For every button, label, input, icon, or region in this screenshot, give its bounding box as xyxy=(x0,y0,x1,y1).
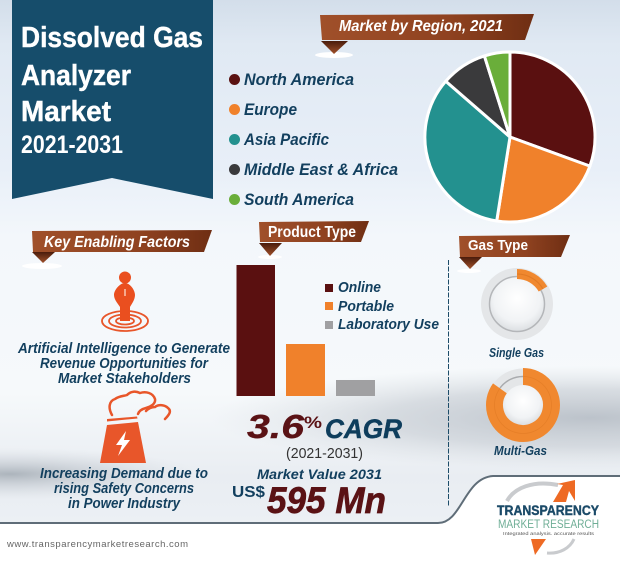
logo: transparency market research xyxy=(497,480,599,555)
donut: single gas: Single Gas xyxy=(489,345,544,360)
legend: regions: North America xyxy=(244,70,354,89)
title banner: Dissolved Gas xyxy=(21,22,203,54)
title banner: Market xyxy=(21,96,111,128)
callout: CAGR: % xyxy=(304,413,322,432)
donut: single gas xyxy=(481,268,553,360)
callout: market value: 595 Mn xyxy=(267,480,386,521)
heading: key enabling factors: Key Enabling Factors xyxy=(44,234,190,251)
footer url: www.transparencymarketresearch.com xyxy=(6,539,188,550)
heading: product type: Product Type xyxy=(268,224,356,241)
legend: regions: Asia Pacific xyxy=(243,130,329,149)
legend: regions: Middle East & Africa xyxy=(244,160,398,179)
logo: transparency market research: MARKET RESEARCH xyxy=(498,519,599,531)
title banner xyxy=(12,0,213,199)
legend: regions xyxy=(229,70,398,209)
callout: market value xyxy=(232,466,386,521)
heading: gas type: Gas Type xyxy=(468,237,528,254)
icon: power plant with smoke xyxy=(100,392,170,463)
legend: product type xyxy=(325,280,439,333)
logo: transparency market research: TRANSPARENCY xyxy=(497,503,599,518)
factor text: artificial intelligence: Artificial Intelligence to Generate xyxy=(17,341,230,357)
legend: product type: Portable xyxy=(338,299,394,315)
factor text: artificial intelligence: Revenue Opportunities for xyxy=(40,356,209,372)
legend: regions: South America xyxy=(244,190,354,209)
callout: CAGR: (2021-2031) xyxy=(286,445,363,462)
factor text: artificial intelligence: Market Stakeholders xyxy=(58,371,191,387)
heading: product type xyxy=(258,221,369,259)
title banner: 2021-2031 xyxy=(21,131,123,159)
divider: dashed vertical line xyxy=(448,260,450,507)
donut: multi-gas xyxy=(486,368,560,458)
factor text: increasing demand xyxy=(40,466,208,512)
callout: market value: US$ xyxy=(232,484,265,501)
factor text: artificial intelligence xyxy=(17,341,230,387)
heading: market by region xyxy=(315,14,534,58)
callout: CAGR xyxy=(247,408,402,462)
pie chart: market by region xyxy=(425,52,595,222)
legend: product type: Laboratory Use xyxy=(338,317,439,333)
title banner: Analyzer xyxy=(21,60,131,92)
callout: CAGR: 3.6 xyxy=(247,408,305,445)
heading: market by region: Market by Region, 2021 xyxy=(339,18,503,35)
heading: key enabling factors xyxy=(22,230,212,269)
factor text: increasing demand: Increasing Demand due to xyxy=(40,466,208,482)
factor text: increasing demand: in Power Industry xyxy=(68,496,181,512)
bar chart: product type xyxy=(236,265,375,396)
donut: multi-gas: Multi-Gas xyxy=(494,443,547,458)
callout: market value: Market Value 2031 xyxy=(257,466,382,482)
logo: transparency market research: Integrated analysis. accurate results xyxy=(503,531,595,536)
heading: gas type xyxy=(457,235,570,273)
factor text: increasing demand: rising Safety Concerns xyxy=(54,481,194,497)
callout: CAGR: CAGR xyxy=(325,414,402,444)
legend: regions: Europe xyxy=(244,100,297,119)
icon: person on target xyxy=(102,272,148,331)
legend: product type: Online xyxy=(338,280,381,296)
